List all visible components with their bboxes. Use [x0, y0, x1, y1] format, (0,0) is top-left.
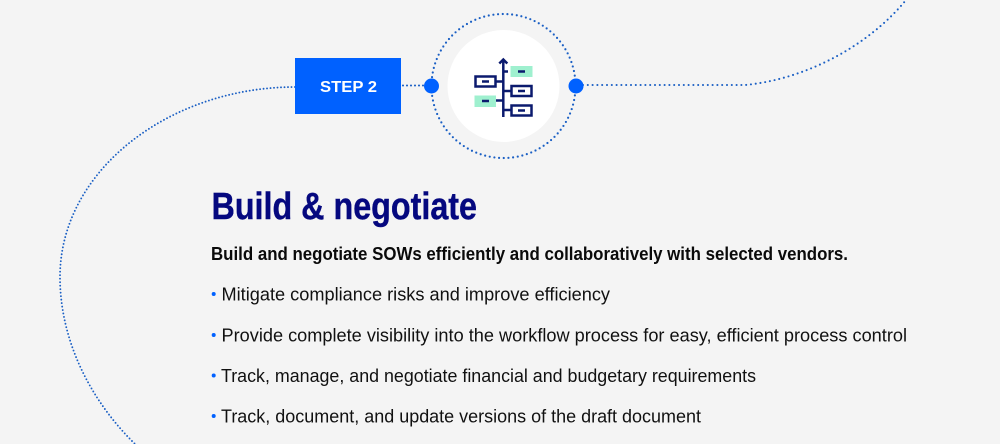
timeline arrow: [476, 60, 532, 117]
dotted ring around icon: [432, 14, 576, 158]
right dotted connector curve: [583, 0, 906, 85]
step badge: STEP 2: [320, 79, 377, 96]
bullet list: [212, 284, 907, 426]
icon: white disc with workflow timeline: [448, 30, 560, 142]
bullet 2: Provide complete visibility into the workflow process for easy, efficient process control: [222, 326, 907, 346]
step badge: [295, 58, 401, 114]
bullet 4: Track, document, and update versions of the draft document: [221, 406, 701, 426]
right ring node: [568, 78, 584, 94]
green note left: [474, 96, 496, 107]
dotted connector from step box to node: [403, 84, 425, 87]
intro sentence: Build and negotiate SOWs efficiently and collaboratively with selected vendors.: [211, 244, 848, 264]
bullet 3: Track, manage, and negotiate financial and budgetary requirements: [221, 366, 756, 386]
heading: Build & negotiate: [212, 186, 477, 228]
left dotted connector curve: [60, 87, 295, 444]
green note top right: [510, 66, 532, 77]
left ring node: [424, 78, 439, 94]
bullet 1: Mitigate compliance risks and improve efficiency: [222, 284, 610, 304]
